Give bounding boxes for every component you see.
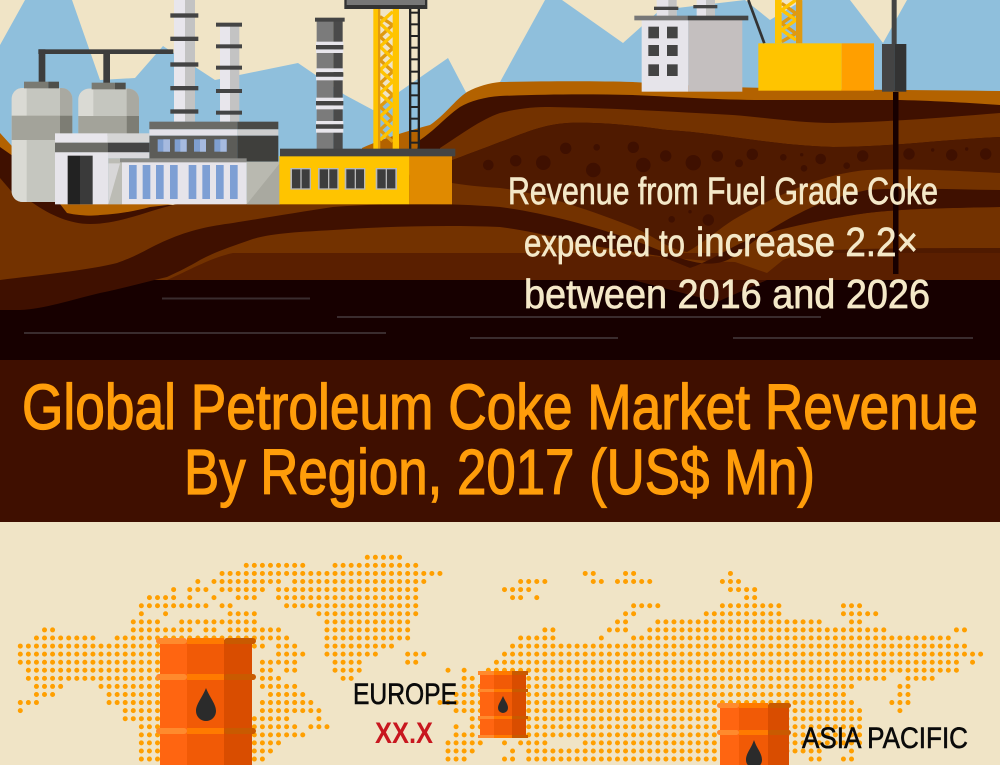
icon: yellow drilling mast — [373, 9, 399, 149]
label: asia pacific: ASIA PACIFIC — [802, 722, 968, 755]
icon: asia pacific oil barrel — [717, 703, 791, 765]
icon: wellhead — [882, 0, 906, 92]
heading: By Region, 2017 (US$ Mn) — [184, 436, 815, 508]
icon: rooftop chimneys — [654, 0, 717, 16]
illustration: rig on the right — [634, 0, 906, 92]
icon: storage tank two — [78, 83, 139, 155]
label: europe: EUROPE — [353, 678, 457, 711]
title band — [0, 360, 1000, 522]
icon: mast platform — [344, 0, 427, 9]
panel: main building — [55, 122, 280, 204]
drill pipe underground — [893, 92, 898, 274]
icon: europe oil barrel — [478, 671, 528, 738]
icon: pipes — [38, 49, 173, 83]
chart: dotted world map — [20, 557, 982, 759]
callout: fuel grade coke revenue: increase 2.2× — [696, 219, 918, 265]
icon: north america oil barrel — [156, 638, 256, 765]
icon: cable — [748, 0, 764, 43]
icon: storage tank one — [12, 82, 72, 202]
callout: fuel grade coke revenue: expected to — [524, 223, 685, 265]
illustration: refinery on the left — [12, 0, 455, 204]
icon: mast base — [775, 0, 802, 43]
soil pebbles — [483, 142, 991, 226]
callout: fuel grade coke revenue: between 2016 and 2026 — [524, 271, 930, 317]
label: europe: XX.X — [375, 717, 433, 750]
icon: second chimney — [216, 23, 242, 122]
icon: grey chimney — [315, 18, 345, 149]
panel: mountains — [0, 0, 1000, 200]
panel: ground layers — [0, 81, 1000, 360]
icon: yellow machine box — [758, 43, 874, 91]
heading — [22, 371, 978, 508]
strata lines — [24, 298, 973, 339]
icon: tall chimney — [170, 0, 198, 122]
panel: grey building — [634, 16, 748, 92]
panel: yellow building — [279, 149, 455, 204]
label: europe — [353, 678, 457, 750]
callout: fuel grade coke revenue — [508, 171, 938, 317]
icon: ladder — [409, 9, 420, 149]
black bedrock — [0, 280, 1000, 360]
